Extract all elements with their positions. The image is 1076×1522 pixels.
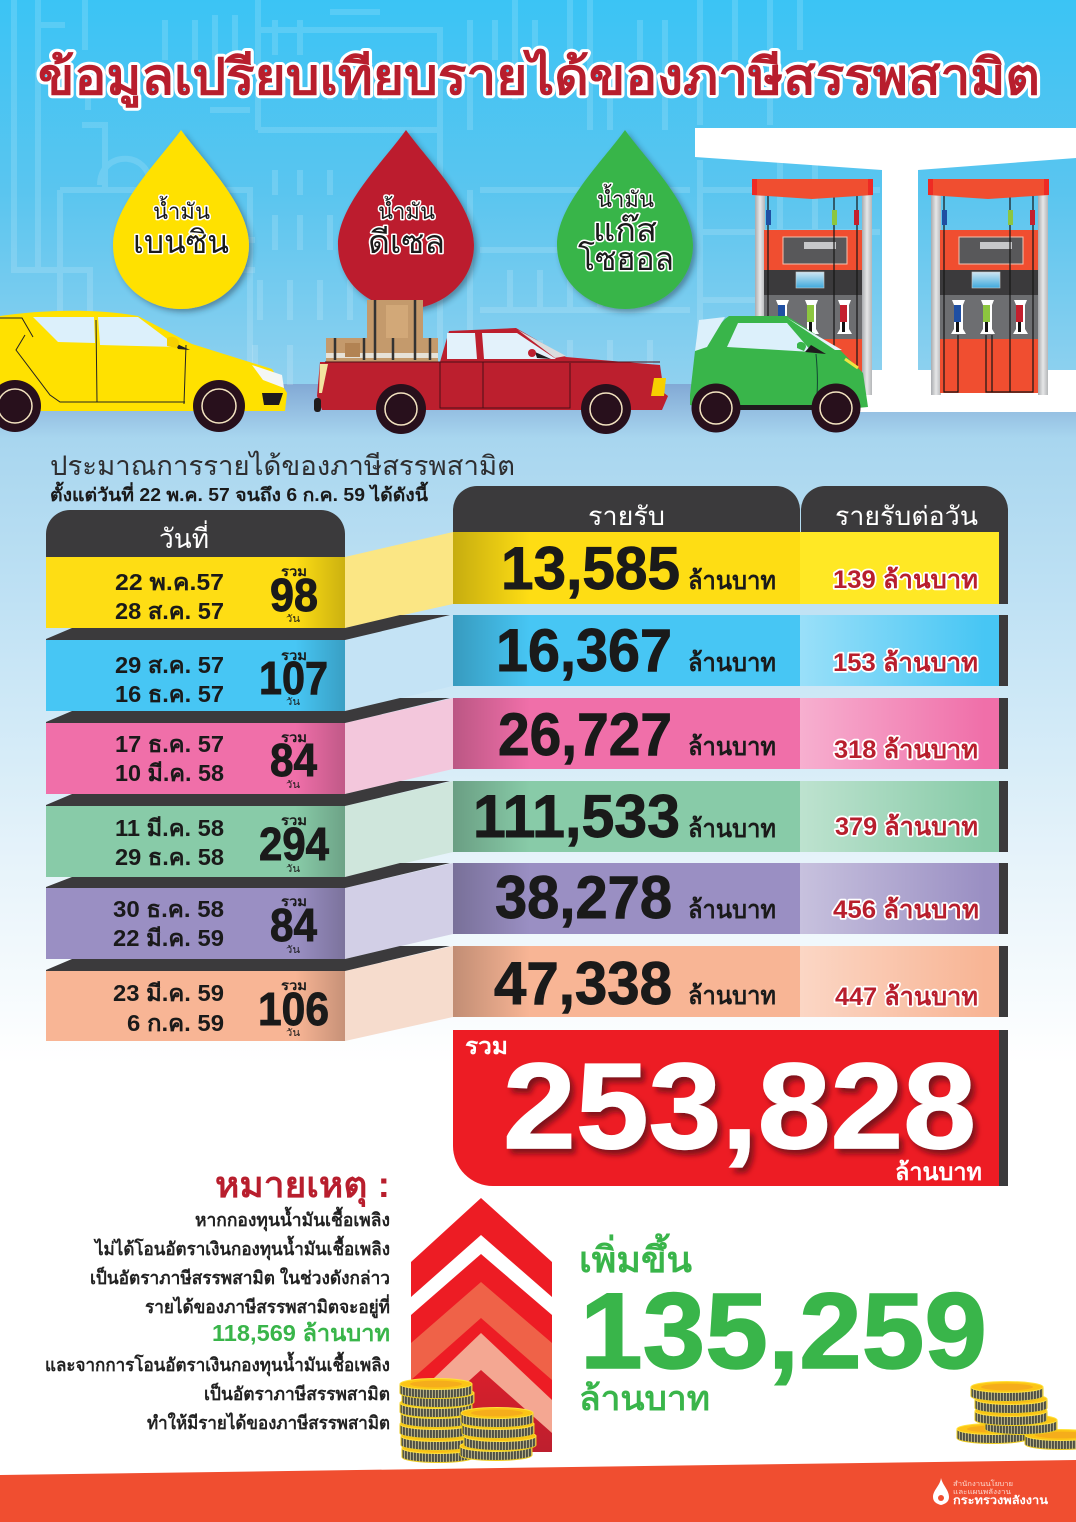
fuel drop: diesel: ดีเซล [368, 224, 445, 260]
date row 3: วัน [286, 780, 300, 791]
note text block [45, 1206, 390, 1433]
date row 3: 84 [270, 734, 317, 786]
subheading: date range: ตั้งแต่วันที่ 22 พ.ค. 57 จนถึง 6 ก.ค. 59 ได้ดังนี้ [50, 481, 429, 505]
heading: estimated revenue: ประมาณการรายได้ของภาษีสรรพสามิต [50, 451, 515, 481]
date row 2: 29 ส.ค. 57 [115, 652, 224, 678]
green smart car [690, 316, 868, 432]
date row 4: 11 มี.ค. 58 [115, 815, 224, 841]
date row 6: 6 ก.ค. 59 [127, 1010, 224, 1036]
panel: revenue table [453, 486, 1008, 1017]
footer logo: Ministry of Energy: กระทรวงพลังงาน [953, 1494, 1049, 1507]
revenue row 5: 38,278 [495, 864, 672, 931]
note heading: หมายเหตุ : [215, 1164, 390, 1208]
revenue row 4: 379 ล้านบาท [835, 813, 978, 841]
date row 5 [46, 888, 345, 959]
note text block: 118,569 ล้านบาท [212, 1320, 390, 1346]
revenue row 2: 153 ล้านบาท [833, 649, 978, 677]
footer logo: Ministry of Energy: และแผนพลังงาน [953, 1488, 1011, 1496]
date row 4: วัน [286, 864, 300, 875]
date row 6 [46, 971, 345, 1041]
panel: connector bands between date and revenue columns [46, 532, 453, 1041]
icon: right coin stack [957, 1382, 1076, 1450]
date row 6: รวม [281, 978, 307, 993]
revenue row 1 [453, 532, 1008, 604]
fuel pump 1 [752, 179, 873, 395]
revenue row 4: 111,533 [473, 783, 680, 850]
gas station canopy [695, 128, 1076, 412]
revenue row 5: 456 ล้านบาท [833, 896, 979, 924]
fuel drop: benzene [113, 130, 249, 309]
fuel drop: gasohol: โซฮอล [578, 241, 674, 277]
date column header [46, 510, 345, 557]
title: ข้อมูลเปรียบเทียบรายได้ของภาษีสรรพสามิต [38, 48, 1040, 108]
panel: total revenue: ล้านบาท [895, 1159, 982, 1186]
date row 1: 28 ส.ค. 57 [115, 598, 224, 624]
yellow car [0, 311, 287, 432]
date row 1: วัน [286, 614, 300, 625]
revenue row 4 [453, 781, 1008, 852]
date row 2: วัน [286, 697, 300, 708]
revenue row 6: ล้านบาท [688, 982, 776, 1010]
date row 6: วัน [286, 1028, 300, 1039]
revenue header [453, 486, 800, 532]
revenue row 3 [453, 698, 1008, 769]
fuel drop: diesel: น้ำมัน [378, 196, 435, 224]
fuel drop: benzene: น้ำมัน [153, 196, 210, 224]
revenue row 2: 16,367 [496, 617, 672, 684]
fuel pump 2 [928, 179, 1049, 395]
date row 2: รวม [281, 648, 307, 663]
date row 3: 17 ธ.ค. 57 [115, 731, 224, 757]
revenue row 1: 13,585 [501, 535, 680, 602]
date row 1 [46, 557, 345, 628]
date row 1: รวม [281, 564, 307, 579]
revenue row 3: ล้านบาท [688, 733, 776, 761]
date row 2: 107 [259, 652, 328, 704]
note text block: ไม่ได้โอนอัตราเงินกองทุนน้ำมันเชื้อเพลิง [93, 1235, 390, 1261]
icon: left coin stacks [400, 1378, 536, 1462]
background road and fade [0, 384, 1076, 1064]
fuel drop: diesel [338, 130, 474, 309]
date row 3: 10 มี.ค. 58 [115, 760, 224, 786]
increase label: เพิ่มขึ้น [579, 1233, 692, 1280]
date row 2: 16 ธ.ค. 57 [115, 681, 224, 707]
background sky [0, 0, 1076, 385]
fuel drop: gasohol: น้ำมัน [597, 184, 654, 212]
footer band [0, 1460, 1076, 1522]
fuel drop: gasohol [557, 130, 693, 309]
date row 4 [46, 806, 345, 877]
revenue row 1: ล้านบาท [688, 567, 776, 595]
date row 1: 22 พ.ค.57 [115, 569, 224, 595]
revenue per day header [801, 486, 1008, 532]
date row 6: 106 [258, 983, 329, 1035]
date row 2 [46, 640, 345, 711]
revenue row 6 [453, 946, 1008, 1017]
increase unit: ล้านบาท [579, 1380, 710, 1418]
date row 5: รวม [281, 894, 307, 909]
date row 5: วัน [286, 945, 300, 956]
date row 6: 23 มี.ค. 59 [113, 980, 224, 1006]
footer logo: Ministry of Energy [933, 1478, 1049, 1507]
revenue row 6: 47,338 [494, 950, 672, 1017]
revenue row 4: ล้านบาท [688, 815, 776, 843]
date row 4: 294 [259, 818, 329, 870]
icon: rising chevrons [411, 1198, 552, 1452]
revenue row 5: ล้านบาท [688, 896, 776, 924]
revenue per day header: รายรับต่อวัน [835, 501, 978, 531]
revenue row 1: 139 ล้านบาท [833, 566, 978, 594]
fuel drop: gasohol: แก๊ส [593, 212, 657, 248]
panel: total revenue: รวม [465, 1033, 508, 1059]
date row 5: 30 ธ.ค. 58 [113, 896, 224, 922]
date row 5: 84 [270, 899, 317, 951]
date row 5: 22 มี.ค. 59 [113, 925, 224, 951]
date row 3: รวม [281, 730, 307, 745]
note text block: และจากการโอนอัตราเงินกองทุนน้ำมันเชื้อเพลิง [45, 1351, 390, 1377]
note text block: หากกองทุนน้ำมันเชื้อเพลิง [195, 1206, 390, 1232]
panel: total revenue: 253,828 [503, 1038, 976, 1174]
revenue row 3: 26,727 [498, 701, 672, 768]
revenue row 2: ล้านบาท [688, 649, 776, 677]
date column header: วันที่ [159, 520, 209, 554]
note text block: รายได้ของภาษีสรรพสามิตจะอยู่ที่ [145, 1294, 390, 1319]
note text block: ทำให้มีรายได้ของภาษีสรรพสามิต [147, 1412, 390, 1433]
revenue row 2 [453, 615, 1008, 686]
footer logo: Ministry of Energy: สำนักงานนโยบาย [953, 1479, 1013, 1488]
revenue header: รายรับ [588, 501, 665, 531]
note text block: เป็นอัตราภาษีสรรพสามิต ในช่วงดังกล่าว [90, 1266, 390, 1288]
increase value: 135,259 [580, 1270, 987, 1391]
date row 1: 98 [270, 569, 318, 621]
revenue row 5 [453, 863, 1008, 934]
date row 4: รวม [281, 813, 307, 828]
panel: date table [46, 510, 345, 1041]
revenue row 6: 447 ล้านบาท [835, 983, 978, 1011]
note text block: เป็นอัตราภาษีสรรพสามิต [204, 1382, 390, 1404]
fuel drop: benzene: เบนซิน [133, 224, 229, 260]
date row 3 [46, 723, 345, 794]
red pickup truck with cargo boxes [314, 300, 668, 434]
panel: total revenue [453, 1030, 1008, 1186]
date row 4: 29 ธ.ค. 58 [115, 844, 224, 870]
revenue row 3: 318 ล้านบาท [834, 736, 978, 764]
